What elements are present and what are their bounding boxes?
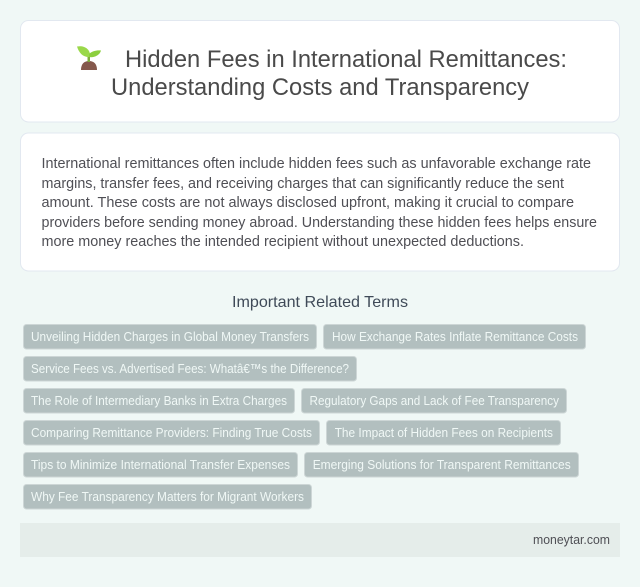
title: Understanding Costs and Transparency [111,74,530,101]
text block: description: amount. These costs are not always disclosed upfront, making it crucial to compare [42,195,574,211]
panel: title card [20,20,620,122]
tag: hidden charges: Unveiling Hidden Charges in Global Money Transfers [31,329,309,344]
footer: moneytar.com [533,533,610,547]
text block: description: margins, transfer fees, and receiving charges that can significantly reduce the sent [42,176,564,192]
text block: description: International remittances often include hidden fees such as unfavorable exchange rate [42,156,591,172]
footer [20,523,620,557]
tag: comparing providers: Comparing Remittance Providers: Finding True Costs [31,425,312,440]
panel: description card [20,133,620,271]
text block: description [42,156,597,250]
title: Hidden Fees in International Remittances: [125,46,567,73]
title [111,46,567,101]
heading: important related terms: Important Related Terms [232,294,408,311]
tag: impact on recipients [326,420,560,445]
tag: emerging solutions: Emerging Solutions for Transparent Remittances [313,457,571,472]
tag: exchange rates: How Exchange Rates Inflate Remittance Costs [332,329,578,344]
tag: hidden charges [24,324,316,349]
text block: description: more money reaches the intended recipient without unexpected deductions. [42,234,524,250]
tag: comparing providers [24,420,320,445]
tag: exchange rates [324,324,586,349]
tag: regulatory gaps: Regulatory Gaps and Lack of Fee Transparency [310,393,559,408]
tag: minimize expenses: Tips to Minimize International Transfer Expenses [31,457,290,472]
tag: intermediary banks [24,388,294,413]
tag: emerging solutions [304,452,578,477]
tag: service fees: Service Fees vs. Advertised Fees: Whatâ€™s the Difference? [31,361,349,376]
tag: service fees [24,356,356,381]
tag: regulatory gaps [302,388,566,413]
tag: minimize expenses [24,452,298,477]
panel: related term tags [24,324,586,509]
tag: intermediary banks: The Role of Intermediary Banks in Extra Charges [31,393,287,408]
tag: migrant workers: Why Fee Transparency Matters for Migrant Workers [31,489,304,504]
text block: description: providers before sending money abroad. Understanding these hidden fees helps ensure [42,215,597,231]
tag: impact on recipients: The Impact of Hidden Fees on Recipients [335,425,553,440]
icon: sprout [77,46,101,70]
tag: migrant workers [24,484,312,509]
